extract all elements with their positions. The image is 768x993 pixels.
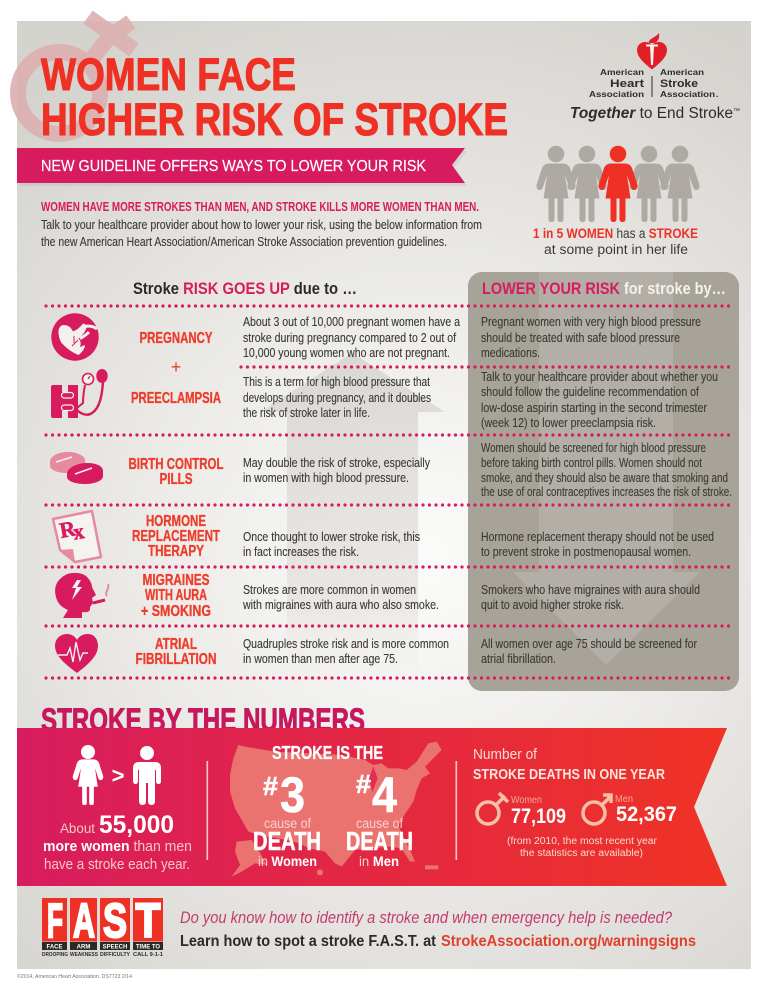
stat: 1 in 5 women caption — [533, 226, 698, 257]
advice text: hormone therapy: to prevent stroke in postmenopausal women. — [481, 545, 691, 559]
logo: FAST: TIME TO — [136, 944, 160, 950]
advice text: preeclampsia: (week 12) to lower preeclampsia risk. — [481, 416, 656, 430]
women: number 3 cause: 3 — [280, 767, 305, 823]
risk text: pregnancy: 10,000 young women who are not pregnant. — [243, 346, 450, 360]
risk text: migraines: Strokes are more common in women — [243, 583, 416, 597]
label: migraines: + SMOKING — [141, 603, 211, 620]
advice text: hormone therapy — [481, 530, 714, 559]
advice text: preeclampsia: low-dose aspirin starting in the second trimester — [481, 401, 707, 415]
label: birth control pills — [128, 456, 224, 488]
call to action: Learn how to spot a stroke F.A.S.T. at — [180, 933, 437, 950]
row: atrial fibrillation — [55, 634, 697, 673]
advice text: birth control: Women should be screened for high blood pressure — [481, 441, 706, 455]
logo: American Heart / Stroke Association: . — [716, 89, 718, 99]
risk text: atrial fibrillation: in women than men after age 75. — [243, 652, 398, 666]
risk text: birth control: in women with high blood pressure. — [243, 471, 409, 485]
title: HIGHER RISK OF STROKE — [41, 94, 508, 145]
logo: FAST: CALL 9-1-1 — [133, 952, 163, 958]
women: number 3 cause — [253, 767, 321, 869]
men: number 4 cause: # — [356, 769, 372, 799]
logo: FAST: F — [47, 895, 63, 948]
stat: stroke deaths in one year: 52,367 — [616, 803, 677, 826]
ribbon banner: NEW GUIDELINE OFFERS WAYS TO LOWER YOUR RISK — [41, 158, 426, 175]
divider left — [206, 761, 208, 860]
title: WOMEN FACE — [41, 49, 296, 100]
risk text: atrial fibrillation — [243, 637, 449, 666]
stat: 55,000 more women: have a stroke each year. — [44, 857, 190, 873]
advice text: migraines: Smokers who have migraines with aura should — [481, 583, 700, 597]
icon: preeclampsia — [51, 369, 108, 418]
risk text: preeclampsia: develops during pregnancy, and it doubles — [243, 391, 431, 405]
ribbon banner — [17, 148, 467, 186]
label: atrial fibrillation — [136, 636, 216, 668]
dotted row dividers — [46, 306, 732, 678]
advice text: birth control: before taking birth control pills. Women should not — [481, 456, 702, 470]
stat: stroke deaths in one year — [473, 746, 677, 859]
heading: stroke by the numbers: STROKE BY THE NUMBERS — [41, 702, 365, 738]
icon: woman greater than man — [73, 745, 161, 805]
icon: prescription sheet: R — [58, 516, 78, 543]
stat: 55,000 more women — [43, 745, 192, 873]
row: birth control pills — [50, 441, 732, 499]
logo: FAST: FACE — [46, 944, 63, 950]
row: hormone replacement therapy — [53, 511, 714, 562]
logo: FAST: DIFFICULTY — [100, 952, 130, 958]
advice text: preeclampsia: Talk to your healthcare provider about whether you — [481, 370, 718, 384]
advice text: preeclampsia — [481, 370, 718, 430]
call to action: StrokeAssociation.org/warningsigns — [441, 933, 696, 950]
risk text: preeclampsia: This is a term for high blood pressure that — [243, 375, 430, 389]
stat: stroke deaths in one year: Number of — [473, 746, 538, 763]
stat: stroke is the 3rd and 4th cause of death: STROKE IS THE — [272, 743, 383, 763]
logo: FAST: WEAKNESS — [70, 952, 98, 958]
icon: prescription sheet — [53, 511, 101, 562]
heading: risk goes up: Stroke RISK GOES UP due to … — [133, 280, 357, 298]
map: United States — [230, 742, 442, 877]
label: migraines: WITH AURA — [145, 587, 207, 604]
icon: female symbol watermark — [18, 17, 134, 134]
icon: heart with ECG — [55, 634, 98, 673]
risk text: hormone therapy: Once thought to lower stroke risk, this — [243, 530, 420, 544]
label: atrial fibrillation: FIBRILLATION — [136, 651, 216, 668]
logo: FAST: ARM — [77, 944, 90, 950]
logo: American Heart / Stroke Association: Association — [589, 89, 644, 99]
icon: pregnancy — [51, 313, 99, 361]
label: migraines: MIGRAINES — [142, 572, 210, 589]
advice text: atrial fibrillation — [481, 637, 697, 666]
label: migraines — [141, 572, 211, 620]
logo: FAST: A — [73, 895, 95, 948]
men: number 4 cause: in Men — [359, 853, 399, 869]
icon: woman greater than man: > — [112, 763, 124, 788]
risk text: birth control — [243, 456, 431, 485]
call to action — [180, 908, 696, 950]
logo: FAST: T — [136, 895, 160, 948]
risk text: preeclampsia — [243, 375, 431, 420]
panel: lower your risk — [468, 272, 739, 691]
logo: FAST: SPEECH — [103, 944, 127, 950]
risk text: atrial fibrillation: Quadruples stroke risk and is more common — [243, 637, 449, 651]
icon: up arrow backdrop — [260, 353, 445, 690]
title — [41, 49, 508, 145]
icon: male symbol — [583, 795, 611, 824]
row: migraines with aura and smoking — [55, 572, 700, 620]
copyright: ©2014, American Heart Association. DS7723 2/14 — [17, 973, 132, 980]
advice text: birth control — [481, 441, 732, 499]
logo: FAST: S — [103, 895, 127, 948]
advice text: pregnancy: Pregnant women with very high blood pressure — [481, 315, 701, 329]
women: number 3 cause: cause of — [264, 815, 311, 831]
icon: pills — [50, 452, 103, 484]
logo: American Heart / Stroke Association: Heart — [610, 78, 644, 90]
label: pregnancy: PREGNANCY — [140, 330, 213, 347]
logo: American Heart / Stroke Association: ™ — [733, 108, 740, 115]
women: number 3 cause: # — [263, 771, 279, 801]
label: hormone replacement therapy: REPLACEMENT — [132, 528, 220, 545]
stat: stroke deaths in one year: 77,109 — [511, 805, 566, 828]
icon: head with cigarette — [55, 573, 108, 618]
logo: American Heart / Stroke Association — [570, 33, 740, 122]
stat: stroke deaths in one year: (from 2010, the most recent year — [507, 836, 658, 847]
risk text: hormone therapy — [243, 530, 420, 559]
plus sign: + — [171, 357, 181, 377]
logo: American Heart / Stroke Association: Together to End Stroke — [570, 105, 734, 122]
logo: American Heart / Stroke Association: Stroke — [660, 78, 698, 90]
stat: stroke deaths in one year: Women — [511, 795, 542, 806]
men: number 4 cause: 4 — [372, 767, 397, 823]
women: number 3 cause: DEATH — [253, 828, 321, 856]
advice text: pregnancy: medications. — [481, 346, 540, 360]
intro text — [41, 200, 482, 249]
label: atrial fibrillation: ATRIAL — [155, 636, 197, 653]
panel: numbers band — [17, 728, 727, 886]
advice text: migraines — [481, 583, 700, 612]
label: hormone replacement therapy — [132, 513, 220, 560]
stat: 1 in 5 women caption: at some point in her life — [544, 242, 688, 257]
logo: American Heart / Stroke Association: American — [600, 67, 644, 77]
advice text: pregnancy: should be treated with safe blood pressure — [481, 331, 680, 345]
advice text: hormone therapy: Hormone replacement therapy should not be used — [481, 530, 714, 544]
stat: 1 in 5 women caption: 1 in 5 WOMEN has a STROKE — [533, 226, 698, 241]
call to action: Do you know how to identify a stroke and when emergency help is needed? — [180, 908, 672, 927]
stat: 55,000 more women: 55,000 — [99, 811, 174, 839]
advice text: atrial fibrillation: atrial fibrillation. — [481, 652, 556, 666]
women: number 3 cause: in Women — [258, 853, 317, 869]
label: hormone replacement therapy: THERAPY — [148, 543, 204, 560]
logo: FAST — [42, 895, 163, 958]
stat: stroke deaths in one year: Men — [615, 794, 633, 805]
men: number 4 cause: DEATH — [346, 828, 413, 856]
men: number 4 cause — [346, 767, 413, 869]
advice text: migraines: quit to avoid higher stroke risk. — [481, 598, 624, 612]
risk text: hormone therapy: in fact increases the risk. — [243, 545, 359, 559]
advice text: pregnancy — [481, 315, 701, 360]
row: pregnancy and preeclampsia — [51, 313, 718, 430]
advice text: preeclampsia: should follow the guideline recommendation of — [481, 385, 699, 399]
risk text: migraines — [242, 583, 439, 612]
advice text: atrial fibrillation: All women over age 75 should be screened for — [481, 637, 697, 651]
divider right — [456, 761, 457, 860]
stat: stroke is the 3rd and 4th cause of death — [253, 743, 413, 869]
risk text: pregnancy: stroke during pregnancy compared to 2 out of — [243, 331, 456, 345]
icon: heart and torch — [637, 33, 667, 70]
risk text: migraines: with migraines with aura who also smoke. — [242, 598, 439, 612]
stat: stroke deaths in one year: STROKE DEATHS IN ONE YEAR — [473, 766, 665, 783]
label: birth control pills: PILLS — [160, 471, 192, 488]
intro text: Talk to your healthcare provider about how to lower your risk, using the below information from — [41, 218, 482, 232]
label: preeclampsia: PREECLAMPSIA — [131, 390, 221, 407]
stat: stroke deaths in one year: the statistics are available) — [520, 848, 643, 859]
label: hormone replacement therapy: HORMONE — [146, 513, 206, 530]
logo: FAST: DROOPING — [42, 952, 68, 958]
men: number 4 cause: cause of — [356, 815, 403, 831]
stat: 55,000 more women: more women than men — [43, 839, 192, 855]
icon: prescription sheet: x — [71, 518, 86, 545]
logo: American Heart / Stroke Association: Association — [660, 89, 715, 99]
risk text: pregnancy — [243, 315, 460, 360]
stat: 55,000 more women: About — [60, 820, 95, 836]
icon: female symbol — [477, 793, 508, 824]
intro text: WOMEN HAVE MORE STROKES THAN MEN, AND STROKE KILLS MORE WOMEN THAN MEN. — [41, 200, 479, 214]
logo: American Heart / Stroke Association: American — [660, 67, 704, 77]
heading: lower your risk: LOWER YOUR RISK for stroke by… — [482, 280, 726, 298]
icon: down arrow backdrop — [513, 272, 700, 665]
label: birth control pills: BIRTH CONTROL — [128, 456, 224, 473]
risk text: birth control: May double the risk of stroke, especially — [243, 456, 431, 470]
intro text: the new American Heart Association/American Stroke Association prevention guidelines. — [41, 235, 447, 249]
pictogram: 1 in 5 women — [536, 146, 700, 222]
risk text: preeclampsia: the risk of stroke later in life. — [243, 406, 370, 420]
risk text: pregnancy: About 3 out of 10,000 pregnant women have a — [243, 315, 460, 329]
